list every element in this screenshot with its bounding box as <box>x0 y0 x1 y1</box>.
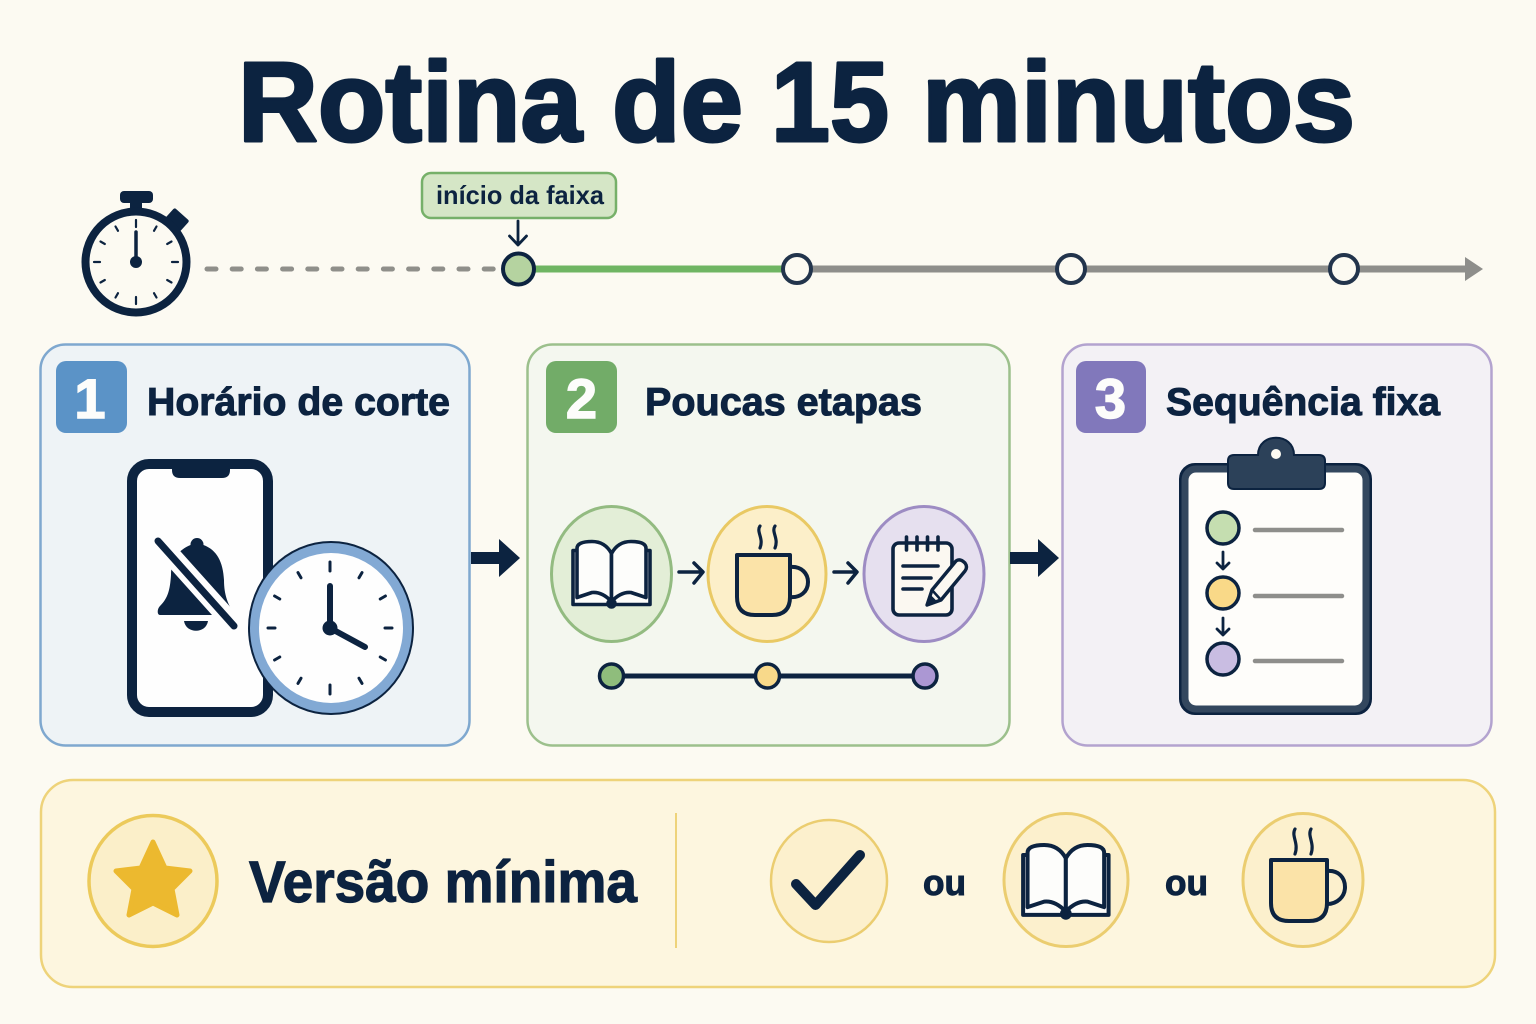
heading: Sequência fixa: Sequência fixa <box>1166 381 1440 424</box>
icon: check <box>771 820 887 942</box>
arrow: panel 1 to panel 2 <box>471 539 520 577</box>
panel: poucas etapas <box>528 344 1010 746</box>
panel: horário de corte <box>40 344 470 746</box>
arrow: book to cup <box>679 563 703 583</box>
step timeline <box>600 664 937 688</box>
label: ou: ou <box>923 862 966 903</box>
title: minutos <box>922 39 1355 165</box>
timeline <box>207 254 1483 284</box>
callout: início da faixa: início da faixa <box>436 180 605 210</box>
icon: cup <box>1243 814 1363 946</box>
panel: versão mínima <box>41 780 1495 987</box>
icon: stopwatch <box>86 191 189 312</box>
heading: Versão mínima: Versão mínima <box>249 850 638 915</box>
heading: Poucas etapas: Poucas etapas <box>645 381 922 424</box>
badge: 2 <box>546 361 617 433</box>
arrow: panel 2 to panel 3 <box>1010 539 1059 577</box>
title: 15 <box>771 39 889 165</box>
callout: início da faixa <box>422 173 616 245</box>
icon: clock <box>248 541 414 715</box>
heading: Horário de corte: Horário de corte <box>147 381 450 424</box>
icon: book in green circle <box>552 506 672 642</box>
badge: 2: 2 <box>566 367 597 430</box>
badge: 1: 1 <box>74 367 106 430</box>
label: ou: ou <box>1165 862 1208 903</box>
title: de <box>612 39 743 165</box>
icon: phone with muted bell <box>132 464 268 712</box>
icon: notepad in purple circle <box>864 506 984 642</box>
icon: star <box>89 816 217 946</box>
icon: book <box>1004 814 1128 946</box>
badge: 1 <box>56 361 127 433</box>
badge: 3 <box>1076 361 1146 433</box>
icon: cup in yellow circle <box>708 506 826 642</box>
title: Rotina <box>238 39 583 165</box>
badge: 3: 3 <box>1095 367 1126 430</box>
panel: sequência fixa <box>1062 344 1492 746</box>
icon: clipboard checklist <box>1181 438 1370 713</box>
arrow: cup to notepad <box>834 563 857 583</box>
